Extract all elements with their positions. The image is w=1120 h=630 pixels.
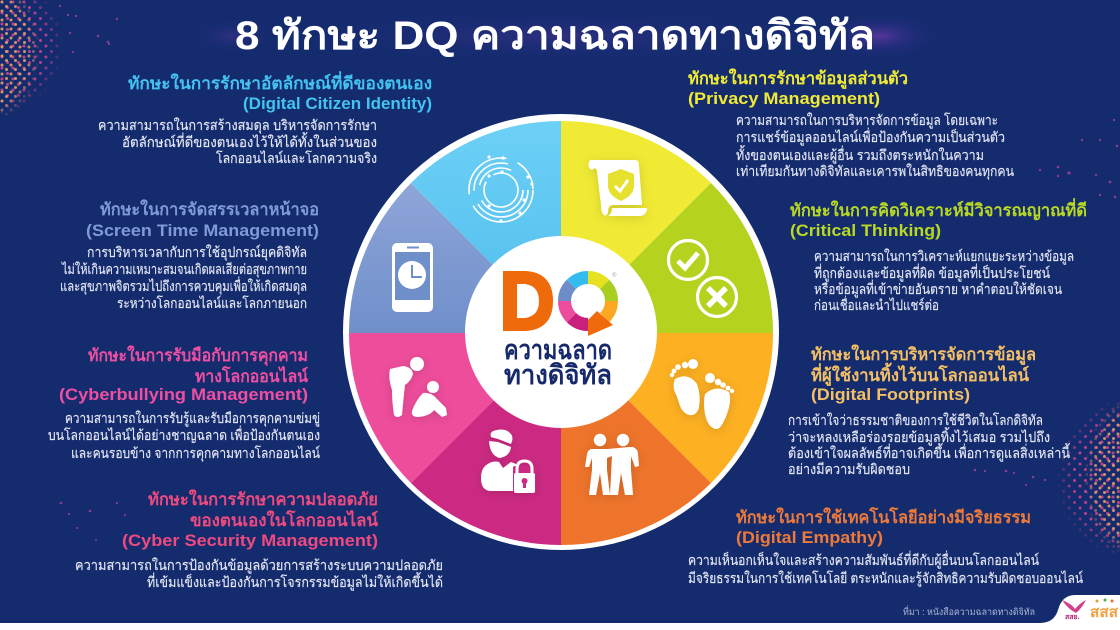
- heading: ทักษะในการบริหารจัดการข้อมูล: [811, 344, 1036, 366]
- text: ระหว่างโลกออนไลน์และโลกภายนอก: [117, 295, 307, 311]
- heading: (Screen Time Management): [86, 221, 319, 240]
- heading: [59, 345, 308, 404]
- heading: [736, 507, 1031, 547]
- heading: [688, 68, 908, 108]
- heading: (Digital Footprints): [811, 385, 970, 404]
- heading: (Privacy Management): [688, 89, 880, 108]
- icon: two people, arm on shoulder: [585, 434, 639, 495]
- logo: left emblem: สสย.: [1065, 614, 1080, 621]
- heading: ทักษะในการจัดสรรเวลาหน้าจอ: [100, 199, 319, 219]
- heading: ทักษะในการคิดวิเคราะห์มีวิจารณญาณที่ดี: [790, 198, 1087, 221]
- text: การเข้าใจว่าธรรมชาติของการใช้ชีวิตในโลกดิจิทัล: [788, 412, 1043, 428]
- text: และสุขภาพจิตรวมไปถึงการควบคุมเพื่อให้เกิดสมดุล: [60, 277, 307, 295]
- footer strip and logo bubble: [0, 595, 1120, 630]
- heading: (Digital Citizen Identity): [243, 94, 432, 113]
- panel: Cyber Security Management: [75, 489, 443, 591]
- text: ความสามารถในการสร้างสมดุล บริหารจัดการรักษา: [98, 117, 377, 134]
- text: ที่เข้มแข็งและป้องกันการโจรกรรมข้อมูลไม่ให้เกิดขึ้นได้: [147, 572, 443, 591]
- icon: person with lock: [481, 430, 536, 493]
- text: และคนรอบข้าง จากการคุกคามทางโลกออนไลน์: [71, 445, 320, 462]
- logo text: ทางดิจิทัล: [504, 360, 612, 390]
- icon: privacy scroll with shield: [588, 160, 647, 216]
- panel: Screen Time Management: [60, 199, 319, 311]
- logo text: ความฉลาด: [504, 335, 612, 365]
- icon: bullied figures: [389, 357, 447, 417]
- heading: [128, 71, 432, 113]
- text: [98, 117, 377, 166]
- heading: ของตนเองในโลกออนไลน์: [190, 510, 378, 530]
- text: [788, 412, 1070, 477]
- text: ก่อนเชื่อและนำไปแชร์ต่อ: [814, 296, 939, 313]
- text: โลกออนไลน์และโลกความจริง: [216, 150, 377, 166]
- text: ไม่ให้เกินความเหมาะสมจนเกิดผลเสียต่อสุขภาพกาย: [61, 261, 307, 278]
- title: 8 ทักษะ DQ ความฉลาดทางดิจิทัล: [235, 14, 875, 58]
- panel: Digital Citizen Identity: [98, 71, 432, 166]
- text: ความเห็นอกเห็นใจและสร้างความสัมพันธ์ที่ดีกับผู้อื่นบนโลกออนไลน์: [688, 551, 1039, 569]
- text: [736, 112, 1014, 180]
- heading: [86, 199, 319, 240]
- logo: DQ mark: ®: [612, 272, 617, 279]
- text: [688, 551, 1083, 587]
- panel: Digital Empathy: [688, 507, 1083, 587]
- panel: Digital Footprints: [788, 344, 1070, 477]
- text: เท่าเทียมกันทางดิจิทัลและเคารพในสิทธิของคนทุกคน: [736, 163, 1014, 180]
- text: [75, 557, 443, 591]
- text: ความสามารถในการรับรู้และรับมือการคุกคามข่มขู่: [65, 410, 320, 427]
- heading: [790, 198, 1087, 240]
- text: [60, 244, 307, 311]
- panel: Privacy Management: [688, 68, 1014, 180]
- logo: left emblem: [1062, 600, 1086, 621]
- wheel: eight skill sectors: [343, 114, 779, 550]
- icon: footprints: [670, 359, 734, 429]
- text: การบริหารเวลากับการใช้อุปกรณ์ยุคดิจิทัล: [87, 244, 307, 261]
- text: ต้องเข้าใจผลลัพธ์ที่อาจเกิดขึ้น เพื่อการดูแลสิ่งเหล่านี้: [788, 443, 1070, 462]
- text: [48, 410, 320, 462]
- logo: DQ mark: [503, 271, 617, 336]
- icon: digital identity rings: [469, 155, 534, 223]
- text: บนโลกออนไลน์ได้อย่างชาญฉลาด เพื่อป้องกันตนเอง: [48, 426, 320, 443]
- text: อย่างมีความรับผิดชอบ: [788, 461, 910, 477]
- source note: ที่มา : หนังสือความฉลาดทางดิจิทัล: [903, 605, 1035, 618]
- text: ความสามารถในการป้องกันข้อมูลด้วยการสร้างระบบความปลอดภัย: [75, 557, 443, 574]
- heading: ทักษะในการรักษาอัตลักษณ์ที่ดีของตนเอง: [128, 71, 432, 93]
- text: ความสามารถในการวิเคราะห์แยกแยะระหว่างข้อมูล: [814, 248, 1074, 265]
- heading: (Cyberbullying Management): [59, 385, 308, 404]
- heading: [811, 344, 1036, 404]
- heading: (Digital Empathy): [736, 528, 883, 547]
- text: อัตลักษณ์ที่ดีของตนเองไว้ให้ได้ทั้งในส่วนของ: [122, 132, 377, 150]
- text: ความสามารถในการบริหารจัดการข้อมูล โดยเฉพาะ: [736, 112, 998, 129]
- text: การแชร์ข้อมูลออนไลน์เพื่อป้องกันความเป็นส่วนตัว: [736, 128, 1005, 146]
- heading: ที่ผู้ใช้งานทิ้งไว้บนโลกออนไลน์: [811, 362, 1029, 387]
- text: ทั้งของตนเองและผู้อื่น รวมถึงตระหนักในความ: [736, 145, 984, 164]
- logo: right emblem: สสส: [1090, 604, 1119, 621]
- heading: (Cyber Security Management): [122, 531, 378, 550]
- centre hub: [465, 236, 657, 428]
- heading: ทักษะในการใช้เทคโนโลยีอย่างมีจริยธรรม: [736, 507, 1031, 527]
- panel: Critical Thinking: [790, 198, 1087, 313]
- heading: ทักษะในการรักษาข้อมูลส่วนตัว: [688, 68, 908, 90]
- logo text: [504, 335, 612, 390]
- heading: ทักษะในการรับมือกับการคุกคาม: [88, 345, 308, 366]
- icon: phone with clock: [392, 243, 433, 312]
- text: ที่ถูกต้องและข้อมูลที่ผิด ข้อมูลที่เป็นประโยชน์: [814, 264, 1050, 282]
- heading: (Critical Thinking): [790, 221, 941, 240]
- text: หรือข้อมูลที่เข้าข่ายอันตราย หาคำตอบให้ชัดเจน: [814, 280, 1062, 298]
- heading: [122, 489, 378, 550]
- text: ว่าจะหลงเหลือร่องรอยข้อมูลทิ้งไว้เสมอ รวมไปถึง: [788, 427, 1050, 446]
- panel: Cyberbullying Management: [48, 345, 320, 462]
- heading: ทางโลกออนไลน์: [195, 366, 308, 386]
- heading: ทักษะในการรักษาความปลอดภัย: [148, 489, 378, 509]
- icon: check and cross circles: [668, 240, 736, 316]
- text: [814, 248, 1074, 313]
